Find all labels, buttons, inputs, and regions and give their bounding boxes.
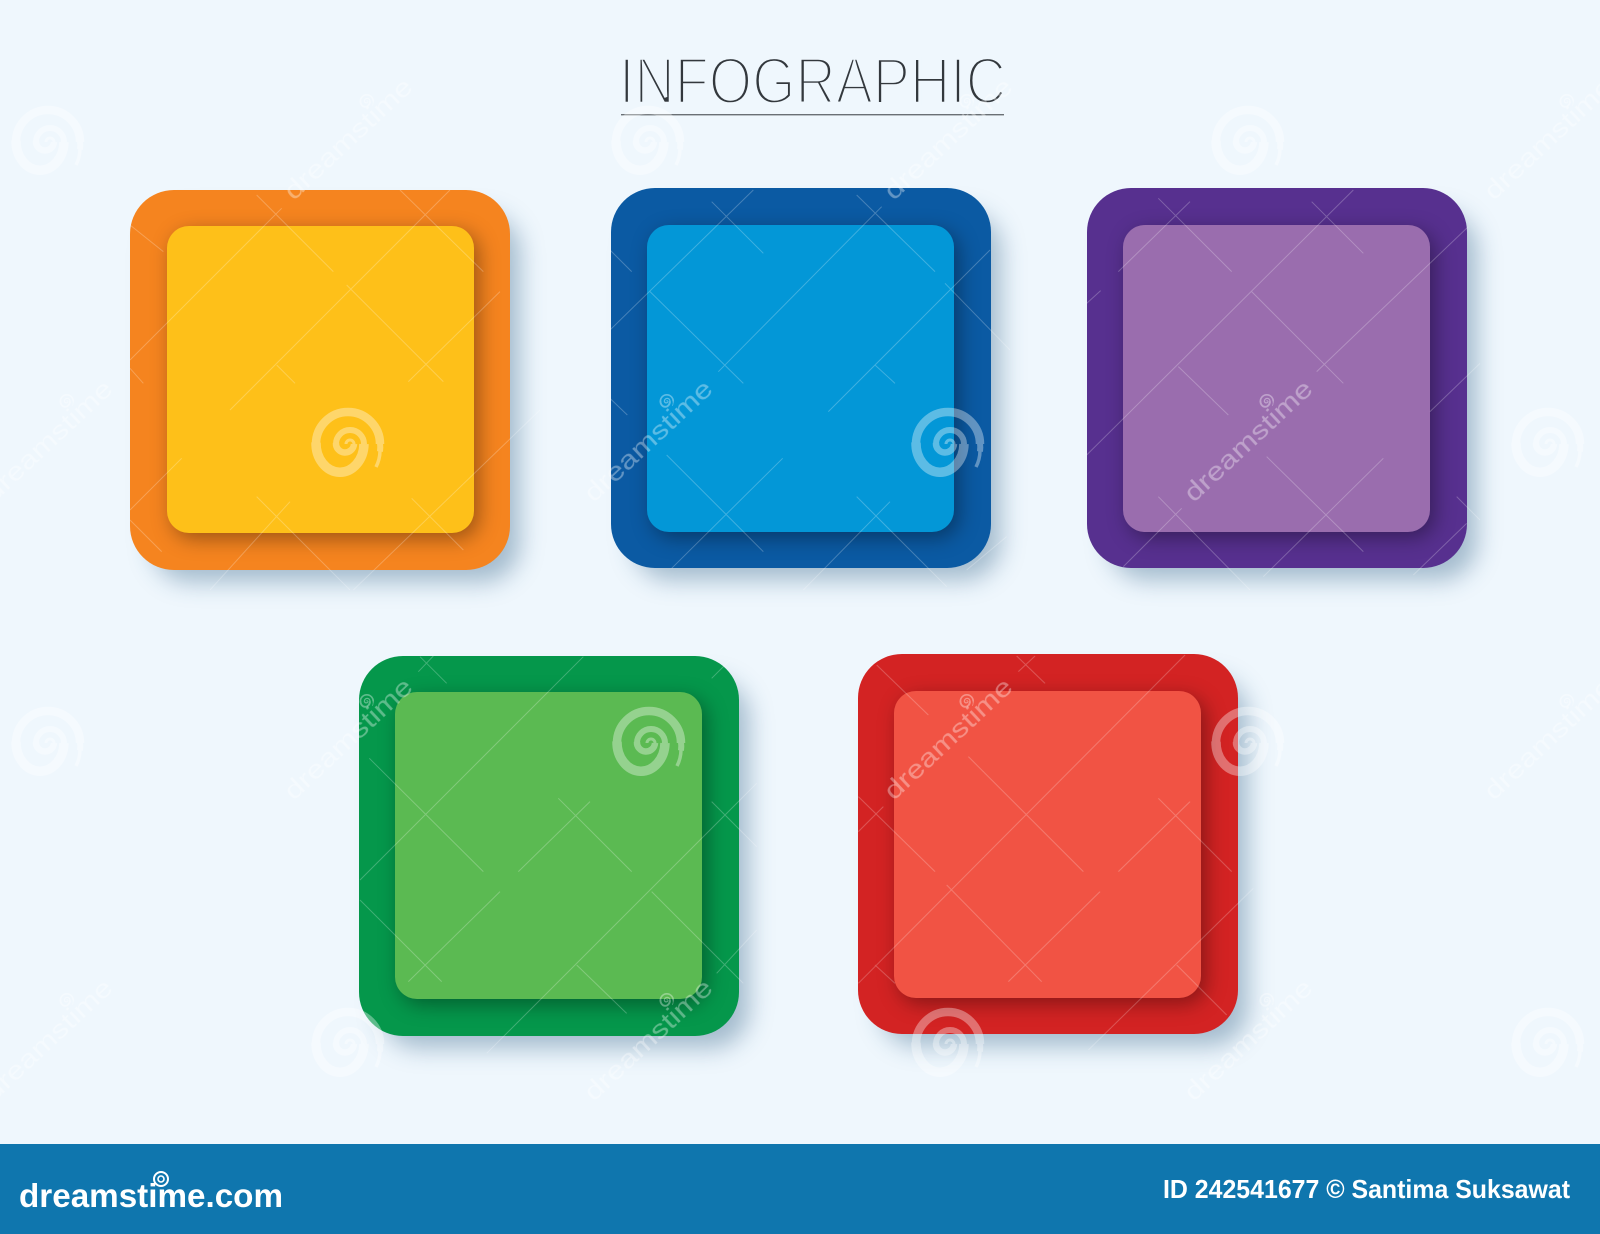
footer credit: image ID and author: ID 242541677 © Santima Suksawat (1163, 1174, 1570, 1204)
watermark text: dreamstime (277, 71, 418, 206)
panel: purple square (1087, 188, 1467, 568)
watermark text: dreamstime (1177, 972, 1318, 1107)
footer logo: dreamstime.com: dreamstime.com (19, 1177, 283, 1214)
watermark spirals (16, 110, 1580, 1072)
watermark small marks (60, 95, 1573, 1006)
footer bar (0, 1144, 1600, 1234)
panel: orange inner square (167, 226, 474, 533)
title: INFOGRAPHIC with underline: INFOGRAPHIC (619, 44, 1006, 118)
watermark text: dreamstime (1477, 671, 1600, 806)
panel: red inner square (894, 691, 1201, 998)
watermark text: dreamstime (577, 373, 718, 508)
panel: green square (359, 656, 739, 1036)
panel: orange square (130, 190, 510, 570)
watermark text: dreamstime (277, 671, 418, 806)
watermark text: dreamstime (877, 71, 1018, 206)
watermark text: dreamstime (1477, 71, 1600, 206)
watermark text: dreamstime (1177, 373, 1318, 508)
watermark lines (130, 190, 1480, 1053)
panel: blue square (611, 188, 991, 568)
watermark text: dreamstime (877, 671, 1018, 806)
panel: red square (858, 654, 1238, 1034)
panel: purple inner square (1123, 225, 1430, 532)
panel: blue inner square (647, 225, 954, 532)
watermark text: dreamstime (577, 972, 718, 1107)
panel: green inner square (395, 692, 702, 999)
